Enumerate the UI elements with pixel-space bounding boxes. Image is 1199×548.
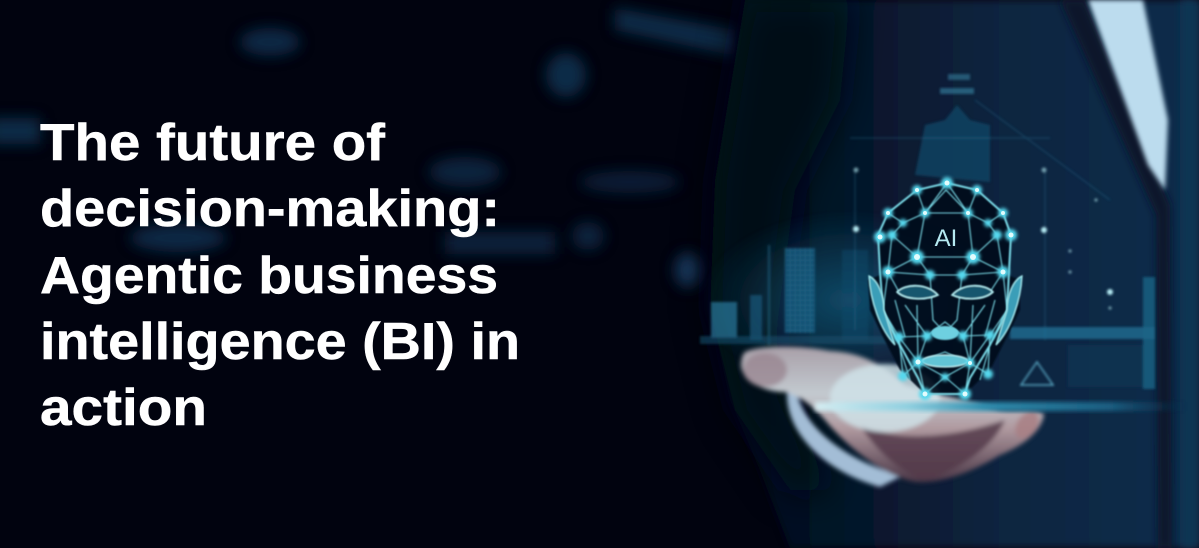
shirt cuff <box>787 393 902 487</box>
thumb tip <box>743 353 787 387</box>
right ear <box>996 276 1022 345</box>
data dots <box>853 168 1113 310</box>
nose <box>931 326 959 340</box>
palm highlight <box>830 364 940 432</box>
right jacket side <box>1180 0 1199 548</box>
palm shadow <box>860 420 1005 480</box>
dark face interior <box>868 183 1020 394</box>
holographic city <box>700 74 1155 390</box>
face nodes glow <box>874 177 1017 400</box>
triangle <box>1021 362 1053 385</box>
right column <box>1143 277 1155 389</box>
grid lines <box>850 100 1110 340</box>
lapel <box>1060 0 1172 548</box>
mouth <box>922 355 968 367</box>
horizontal data band <box>700 336 890 344</box>
left eye <box>897 286 938 299</box>
palm and thumb <box>741 347 1044 482</box>
right eye <box>952 286 993 299</box>
tower <box>915 105 990 182</box>
left building <box>785 248 815 333</box>
AI label: AI <box>935 225 957 252</box>
shirt collar <box>1088 0 1168 190</box>
left ear <box>869 276 895 345</box>
face node cores <box>878 180 1014 396</box>
tower spire labels <box>948 74 970 80</box>
blurred background lights <box>0 8 735 287</box>
suit jacket <box>710 0 1199 548</box>
fingertip <box>1010 407 1044 443</box>
jacket shadow sleeve <box>710 0 850 490</box>
glowing light band <box>815 402 1185 411</box>
face mesh lines <box>878 183 1011 394</box>
title <box>40 114 520 437</box>
title: intelligence (BI) in <box>40 313 520 371</box>
title: The future of <box>40 114 386 172</box>
open hand <box>741 347 1044 487</box>
holographic AI face <box>868 177 1022 400</box>
title: decision-making: <box>40 180 500 238</box>
title: action <box>40 379 207 437</box>
title: Agentic business <box>40 247 498 305</box>
